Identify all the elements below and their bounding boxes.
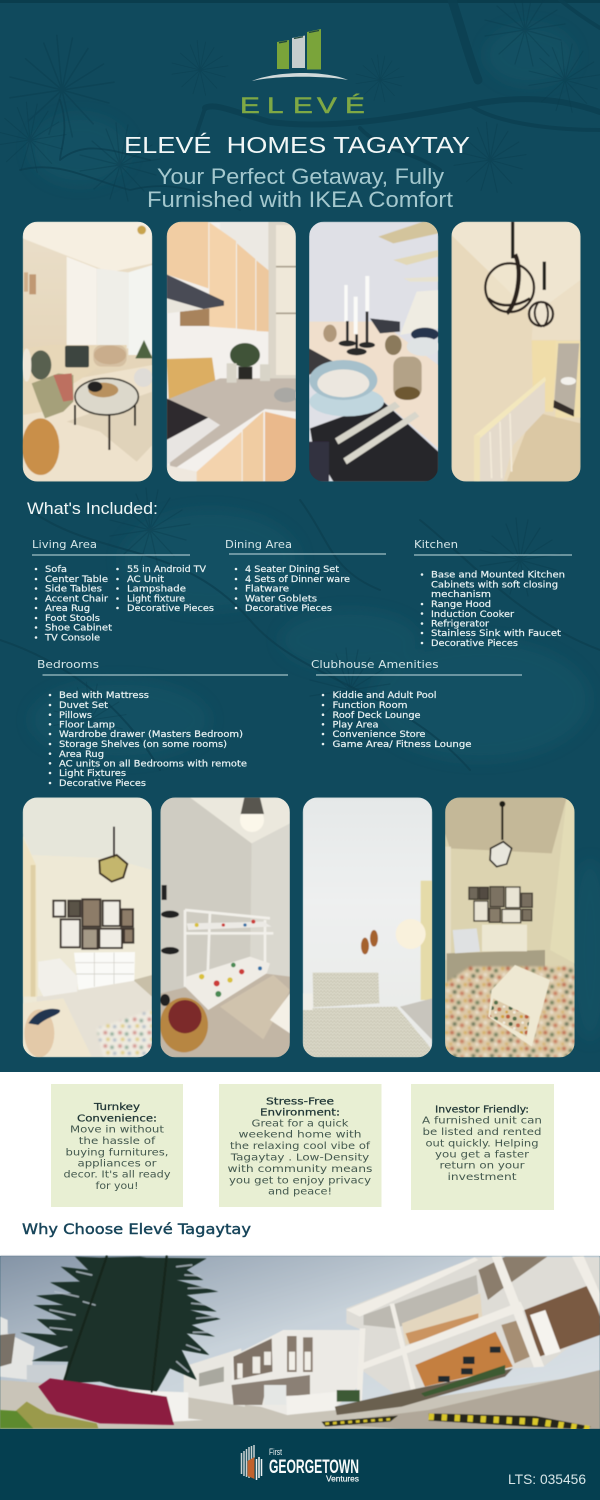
panel: kitchen: Range Hood (431, 600, 491, 610)
panel: kitchen: Base and Mounted Kitchen (431, 570, 565, 580)
panel: dining area: Water Goblets (245, 594, 317, 604)
card: turnkey convenience: buying furnitures, (66, 1147, 168, 1158)
panel: kitchen: Decorative Pieces (431, 639, 518, 649)
buildings and road (0, 1256, 600, 1429)
card: investor friendly: return on your (440, 1161, 526, 1172)
panel: kitchen: Stainless Sink with Faucet (431, 629, 562, 639)
panel: living area: Light fixture (127, 594, 185, 604)
panel: white benefits band (0, 1072, 600, 1256)
panel: kitchen: Cabinets with soft closing (431, 580, 558, 590)
panel: bedrooms (37, 658, 288, 789)
heading: why choose: Why Choose Elevé Tagaytay (22, 1222, 251, 1238)
photo: dining table (309, 222, 440, 482)
panel: bedrooms: Wardrobe drawer (Masters Bedroom) (59, 730, 243, 740)
pine trees and garden (0, 1257, 221, 1428)
card: stress-free environment: the relaxing cool vibe of (230, 1141, 371, 1152)
card: stress-free environment: you get to enjoy privacy (229, 1175, 371, 1186)
panel: living area: Living Area (32, 538, 97, 551)
card: investor friendly: A furnished unit can (422, 1116, 542, 1127)
panel: living area: Foot Stools (45, 614, 100, 624)
card: turnkey convenience: Move in without (70, 1125, 164, 1136)
panel: kitchen (414, 538, 572, 649)
panel: living area: Area Rug (45, 604, 90, 614)
card: turnkey convenience: decor. It's all ready (64, 1170, 171, 1181)
panel: living area: Side Tables (45, 584, 102, 594)
subtitle: Your Perfect Getaway, Fully (157, 164, 445, 189)
title: ELEVÉ HOMES TAGAYTAY (124, 132, 470, 158)
photo: kitchen (167, 222, 298, 482)
panel: clubhouse amenities: Game Area/ Fitness Lounge (332, 740, 472, 750)
photo: stair hall with pendant lights (451, 222, 581, 482)
logo wordmark: ELEVÉ (240, 93, 365, 118)
card: turnkey convenience: Turnkey (93, 1102, 140, 1113)
subtitle: Furnished with IKEA Comfort (147, 187, 454, 212)
panel: clubhouse amenities: Roof Deck Lounge (332, 711, 420, 721)
panel: kitchen: mechanism (431, 590, 491, 600)
panel: clubhouse amenities (311, 658, 522, 750)
card: stress-free environment: Environment: (260, 1108, 340, 1119)
card: investor friendly: investment (448, 1172, 517, 1183)
header: Elevé logo (240, 29, 365, 118)
panel: living area: Accent Chair (45, 594, 108, 604)
card: turnkey convenience (51, 1084, 183, 1207)
card: stress-free environment: Great for a quick (252, 1119, 349, 1130)
card: turnkey convenience: Convenience: (77, 1113, 157, 1124)
panel: living area (32, 538, 214, 644)
photo: bunk bed room (160, 797, 290, 1057)
card: turnkey convenience: for you! (96, 1181, 138, 1192)
panel: dining area: 4 Sets of Dinner ware (245, 575, 350, 585)
card: stress-free environment: Tagaytay . Low-Density (230, 1152, 369, 1163)
panel: living area: Shoe Cabinet (45, 624, 113, 634)
photo: Elevé community street panorama (0, 1256, 600, 1429)
panel: bedrooms: Storage Shelves (on some rooms) (59, 740, 227, 750)
panel: bedrooms: Duvet Set (59, 701, 109, 711)
card: stress-free environment: with community means (228, 1164, 372, 1175)
section heading: What's Included: What's Included: (27, 500, 158, 518)
card: investor friendly: out quickly. Helping (426, 1138, 538, 1149)
panel: clubhouse amenities: Kiddie and Adult Pool (332, 691, 436, 701)
panel: dining area: Dining Area (225, 538, 292, 551)
panel: clubhouse amenities: Clubhouse Amenities (311, 658, 439, 671)
panel: living area: Lampshade (127, 584, 186, 594)
subtitle (147, 164, 454, 212)
card: investor friendly: be listed and rented (422, 1127, 542, 1138)
card: turnkey convenience: appliances or (78, 1159, 158, 1170)
panel: clubhouse amenities: Function Room (332, 701, 408, 711)
logo: First Georgetown Ventures: Ventures (326, 1474, 359, 1484)
panel: bedrooms: Light Fixtures (59, 769, 126, 779)
card: stress-free environment: Stress-Free (266, 1096, 334, 1107)
panel: living area: Sofa (45, 565, 67, 575)
panel: clubhouse amenities: Play Area (332, 720, 378, 730)
card: investor friendly: you get a faster (435, 1149, 530, 1160)
panel: living area: TV Console (44, 634, 100, 644)
panel: living area: AC Unit (127, 575, 165, 585)
logo: First Georgetown Ventures (242, 1445, 359, 1484)
photo: bedroom with floral bedding (445, 797, 575, 1057)
card: investor friendly (411, 1084, 554, 1210)
logo: First Georgetown Ventures: GEORGETOWN (269, 1456, 359, 1478)
panel: living area: 55 in Android TV (127, 565, 206, 575)
logo: First Georgetown Ventures: First (269, 1447, 282, 1457)
panel: bedrooms: Pillows (59, 711, 92, 721)
panel: bedrooms: AC units on all Bedrooms with remote (59, 760, 247, 770)
licence number: LTS: 035456 (508, 1472, 586, 1487)
card: investor friendly: Investor Friendly: (435, 1105, 529, 1116)
panel: dining area: Decorative Pieces (245, 604, 332, 614)
panel: bedrooms: Floor Lamp (59, 720, 115, 730)
card: stress-free environment (219, 1084, 382, 1207)
photo: living room (22, 222, 153, 482)
card: turnkey convenience: the hassle of (79, 1136, 156, 1147)
footer: dark teal band (0, 1429, 600, 1500)
panel: living area: Center Table (45, 575, 108, 585)
panel: dining area: 4 Seater Dining Set (245, 565, 340, 575)
panel: bedrooms: Bed with Mattress (59, 691, 149, 701)
panel: living area: Decorative Pieces (127, 604, 214, 614)
panel: dining area: Flatware (245, 584, 289, 594)
icon: three green and grey towers (252, 29, 348, 81)
panel: bedrooms: Bedrooms (37, 658, 99, 671)
panel: clubhouse amenities: Convenience Store (332, 730, 426, 740)
panel: kitchen: Induction Cooker (431, 610, 514, 620)
card: stress-free environment: and peace! (268, 1186, 332, 1197)
panel: bedrooms: Area Rug (59, 750, 104, 760)
card: stress-free environment: weekend home with (238, 1130, 362, 1141)
panel: kitchen: Refrigerator (431, 620, 489, 630)
photo: bedroom with gallery wall (23, 797, 152, 1057)
panel: dining area (225, 538, 386, 614)
photo: white bedroom with rabbit wall decor (303, 797, 432, 1057)
panel: bedrooms: Decorative Pieces (59, 779, 146, 789)
panel: kitchen: Kitchen (414, 538, 458, 551)
